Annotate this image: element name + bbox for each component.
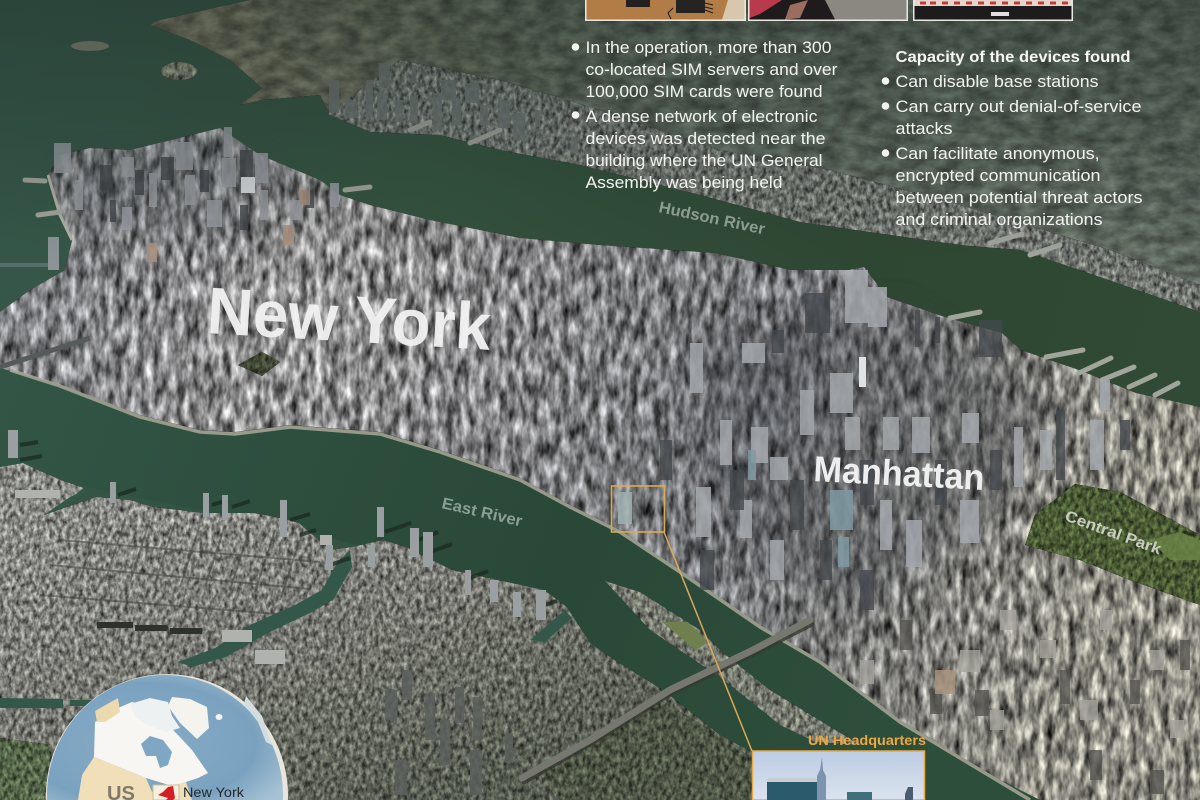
water: East River xyxy=(0,366,1040,800)
buildings: glass towers xyxy=(748,450,853,567)
label: UN Headquarters: UN Headquarters xyxy=(808,733,926,748)
bullet xyxy=(882,102,889,110)
bullet text: dense network detected: A dense network of electronic xyxy=(586,108,818,126)
land: United States xyxy=(78,757,192,800)
bullet text: SIM servers found: In the operation, more than 300 xyxy=(586,39,832,57)
locator globe xyxy=(46,674,288,800)
land: Greenland xyxy=(168,697,209,739)
buildings: Midtown dark faces xyxy=(660,293,1130,610)
text block: operation findings xyxy=(572,39,838,192)
buildings: Upper East Side light blocks xyxy=(860,610,1184,738)
bullet xyxy=(572,43,579,51)
highlight box: UN Headquarters location xyxy=(612,486,664,532)
bullet xyxy=(572,111,579,119)
heading: capacity: Capacity of the devices found xyxy=(896,49,1130,66)
globe rim xyxy=(46,674,288,800)
bridge: Queensboro xyxy=(522,620,812,782)
land: Iceland xyxy=(216,714,222,720)
bullet text: dense network detected: building where the UN General xyxy=(586,152,822,170)
bullet text: disable base stations: Can disable base stations xyxy=(896,73,1098,91)
building: white dome block xyxy=(241,177,255,193)
tone: downtown shadow mass xyxy=(60,140,300,240)
shoreline strip: east side xyxy=(10,370,1030,800)
label: New York: New York xyxy=(183,785,244,800)
photo: red racks on carpet xyxy=(748,0,908,21)
map label: East River: East River xyxy=(440,495,524,530)
land: green lot bottom left xyxy=(0,738,52,800)
land: Jersey City waterfront xyxy=(328,60,1200,312)
map label: Manhattan: Manhattan xyxy=(813,448,985,498)
street grid: Greenpoint blocks xyxy=(40,520,320,615)
building: white tower xyxy=(859,357,866,387)
buildings: Midtown lit faces xyxy=(690,270,1110,580)
bullet text: SIM servers found: 100,000 SIM cards were found xyxy=(586,83,822,101)
photo strip: seized devices xyxy=(585,0,1073,21)
water: Hudson Bay xyxy=(141,736,172,768)
buildings: tan low rises downtown xyxy=(147,190,310,262)
inset frame: New York state xyxy=(153,785,179,800)
bullet xyxy=(882,77,889,85)
buildings: Upper East Side dark blocks xyxy=(900,620,1190,794)
buildings: Queens mid rises xyxy=(385,670,513,795)
building: Bloomberg-style tan block xyxy=(935,670,955,694)
bullet text: denial of service: Can carry out denial-of-service xyxy=(896,98,1142,116)
buildings: Brooklyn warehouses xyxy=(97,622,202,634)
bullet text: anonymous communication: Can facilitate anonymous, xyxy=(896,145,1100,163)
water: Newtown Creek and canals xyxy=(0,490,572,708)
leader line to UN photo xyxy=(664,532,752,751)
shoreline strip: west side xyxy=(48,175,72,240)
buildings: Jersey City skyline xyxy=(329,63,578,153)
globe ocean xyxy=(47,675,283,800)
UN secretariat tower xyxy=(767,778,817,800)
bullet text: denial of service: attacks xyxy=(896,120,952,138)
photo: UN Headquarters xyxy=(752,751,924,800)
piers: Hudson River xyxy=(25,122,1178,395)
land: Hunters Point park xyxy=(540,700,752,800)
text block: capacity of the devices xyxy=(882,49,1142,229)
land: Europe edge xyxy=(244,696,272,745)
right tower xyxy=(905,787,913,800)
bullet text: anonymous communication: encrypted communication xyxy=(896,167,1100,185)
photo: SIM servers on wood floor xyxy=(585,0,746,21)
bullet text: anonymous communication: between potential threat actors xyxy=(896,189,1142,207)
land: Roosevelt Island xyxy=(605,581,860,745)
photo: SIM card rack xyxy=(913,0,1073,21)
tower shadows on the East River xyxy=(20,442,557,605)
land: Canada xyxy=(94,702,208,786)
spire tower xyxy=(817,757,826,800)
bridge: Williamsburg and Holland approach xyxy=(0,265,90,367)
darkening behind text at top xyxy=(0,0,1200,260)
building: pale warehouse roofs xyxy=(15,490,332,664)
buildings: Lower Manhattan dark faces xyxy=(100,150,314,230)
map label: New York: New York xyxy=(205,273,493,364)
park: Central Park xyxy=(1025,484,1200,605)
rear building xyxy=(847,792,872,800)
New York state shape xyxy=(158,786,175,800)
bullet text: dense network detected: Assembly was being held xyxy=(586,174,782,192)
bullet text: dense network detected: devices was detected near the xyxy=(586,130,826,148)
buildings: Lower Manhattan lit faces xyxy=(48,127,339,270)
land: Alaska xyxy=(95,698,120,722)
land: Arctic islands xyxy=(130,698,180,732)
bullet text: SIM servers found: co-located SIM servers and over xyxy=(586,61,838,79)
land: Brooklyn and Queens xyxy=(0,463,752,800)
bullet text: anonymous communication: and criminal organizations xyxy=(896,211,1102,229)
tone: midtown shadow mass xyxy=(680,300,1060,620)
map label: Hudson River: Hudson River xyxy=(657,199,766,238)
land: New Jersey shore xyxy=(120,0,1200,312)
islands: Liberty and Ellis xyxy=(71,41,197,80)
buildings: Long Island City and Brooklyn towers xyxy=(8,430,546,620)
map label: Central Park: Central Park xyxy=(1063,508,1164,558)
park: Stuyvesant Town xyxy=(238,352,280,376)
bullet xyxy=(882,149,889,157)
